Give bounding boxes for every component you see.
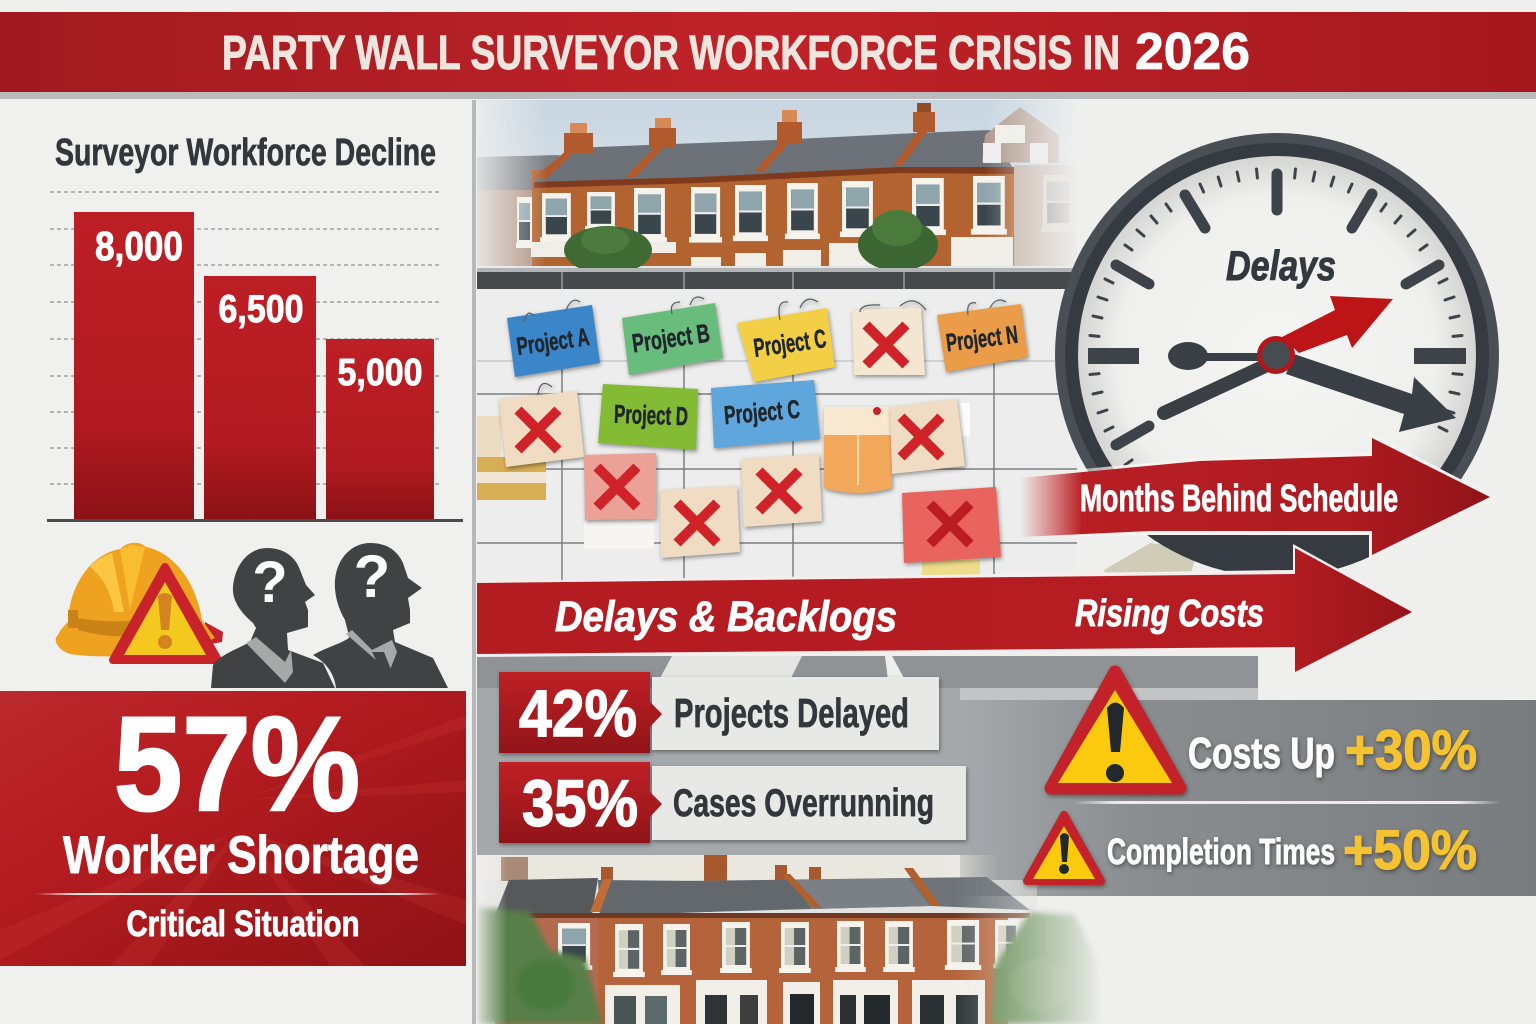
clock hand: dark long — [1286, 354, 1456, 432]
note: Project C blue: Project C — [723, 394, 801, 430]
text: costs up: Costs Up — [1188, 729, 1335, 778]
note: crossed pink — [584, 453, 656, 520]
note: Project D green: Project D — [614, 399, 689, 431]
stat row: 42% projects delayed: Projects Delayed — [674, 690, 909, 736]
note: crossed red — [902, 487, 1001, 563]
label: critical situation: Critical Situation — [126, 903, 360, 944]
text: completion times: Completion Times — [1107, 831, 1335, 872]
stat row: 42% projects delayed — [499, 672, 939, 753]
chart heading: Surveyor Workforce Decline — [55, 132, 436, 174]
clock hand: dark tail — [1164, 366, 1265, 413]
icon: warning triangle small — [113, 567, 218, 660]
icon: warning small — [1027, 815, 1101, 881]
windows — [556, 920, 1021, 977]
label: rising costs: Rising Costs — [1075, 593, 1264, 635]
icon: silhouette with question mark — [313, 543, 448, 688]
label: delays and backlogs: Delays & Backlogs — [555, 593, 897, 641]
arrow: months behind schedule — [1020, 432, 1495, 560]
note: crossed beige — [741, 454, 822, 527]
arrow: months behind schedule: Months Behind Schedule — [1080, 478, 1398, 520]
note: Project N: Project N — [945, 321, 1019, 357]
stat row: 42% projects delayed: 42% — [519, 676, 637, 750]
note: Project A — [507, 300, 600, 377]
bar: 5,000 — [326, 339, 434, 520]
panel: worker shortage callout — [0, 690, 466, 966]
note: orange folded paper — [824, 407, 892, 493]
image: terraced houses top — [477, 100, 1080, 274]
windows — [516, 175, 1076, 248]
bar chart — [47, 192, 463, 522]
note: Project C yellow — [737, 299, 835, 382]
title banner — [0, 12, 1536, 99]
tree — [858, 210, 938, 271]
note: crossed beige right — [890, 399, 965, 474]
title banner: 2026 — [1135, 23, 1250, 81]
bar: 6,500 — [204, 276, 316, 520]
stat row: 35% cases overrunning: Cases Overrunning — [673, 782, 934, 825]
stat row: 35% cases overrunning — [499, 762, 966, 843]
image: terraced houses bottom — [477, 855, 1100, 1024]
panel: gray backdrop — [477, 656, 1536, 896]
note: Project B: Project B — [630, 318, 712, 358]
icon: silhouette with question mark: ? — [354, 543, 390, 610]
panel: left column — [0, 100, 476, 1024]
note: Project D green — [598, 384, 698, 450]
text: +50%: +50% — [1343, 818, 1477, 881]
clock — [1055, 133, 1499, 580]
ground floor bays — [605, 980, 985, 1024]
clock hand: red — [1282, 296, 1393, 353]
bar: 8,000: 8,000 — [95, 223, 183, 269]
tree — [564, 226, 652, 274]
panel: project calendar board — [477, 268, 1198, 583]
panel: cost impact text — [1027, 672, 1500, 881]
icon: silhouette with question mark: ? — [252, 550, 288, 615]
note: crossed beige top — [852, 301, 926, 375]
text: +30%: +30% — [1345, 718, 1477, 781]
clock ticks — [1088, 169, 1466, 541]
clock hand: knob — [1168, 342, 1262, 370]
note: Project A: Project A — [515, 323, 591, 361]
clock hub — [1257, 336, 1295, 374]
stat: 57%: 57% — [114, 690, 360, 839]
label: worker shortage: Worker Shortage — [63, 826, 419, 885]
ground floor bays — [531, 237, 1013, 266]
note: Project C blue — [711, 380, 820, 448]
bar: 8,000 — [74, 212, 194, 520]
title banner: PARTY WALL SURVEYOR WORKFORCE CRISIS IN — [222, 27, 1120, 80]
chimneys and party walls — [536, 103, 935, 180]
chimneys — [501, 855, 821, 881]
bar: 6,500: 6,500 — [218, 288, 304, 331]
note: Project N — [937, 300, 1028, 372]
note: Project C yellow: Project C — [752, 323, 828, 363]
icon: warning large — [1051, 672, 1180, 788]
note: crossed beige — [660, 486, 740, 558]
note: Project B — [622, 297, 723, 375]
tree left — [477, 907, 603, 1024]
label: delays: Delays — [1226, 242, 1336, 289]
arrow: delays and backlogs, rising costs — [477, 544, 1416, 677]
tree right — [991, 912, 1100, 1024]
icon: silhouette with question mark — [211, 548, 335, 688]
bar: 5,000: 5,000 — [338, 352, 422, 394]
icon: hard hat — [56, 543, 223, 656]
stat row: 35% cases overrunning: 35% — [522, 766, 638, 840]
note: crossed beige left — [499, 383, 584, 467]
